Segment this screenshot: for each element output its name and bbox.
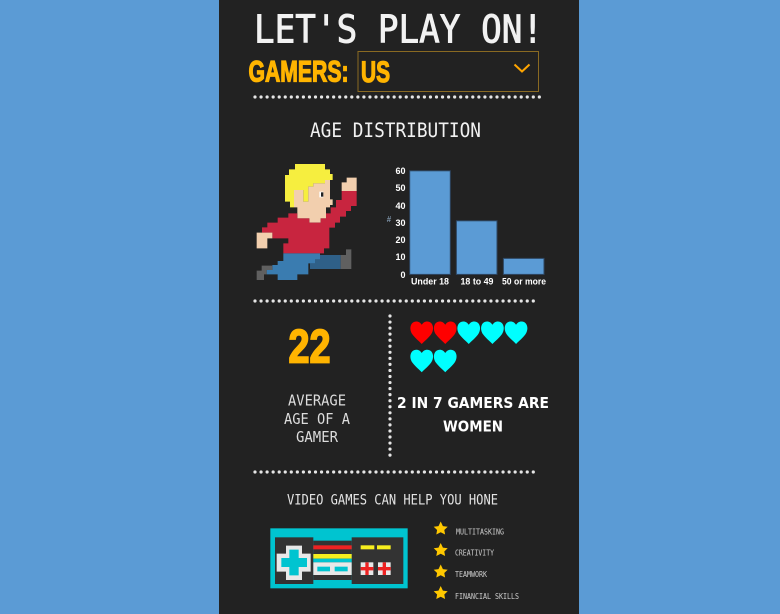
stat: women gamers [397, 394, 549, 436]
x axis labels [411, 276, 546, 286]
skills list [434, 522, 519, 601]
big number: 22 [288, 320, 330, 372]
dark central panel [219, 0, 579, 614]
gamers selector [248, 52, 538, 92]
stat: women gamers: WOMEN [443, 418, 503, 436]
y axis labels: 60 [395, 166, 406, 176]
y axis labels: 0 [400, 270, 406, 280]
x axis labels: 50 or more [502, 276, 546, 286]
skill labels: FINANCIAL SKILLS [455, 592, 519, 601]
icon: running pixel character [257, 164, 357, 280]
selector box [358, 52, 538, 92]
icon: game controller [270, 528, 408, 588]
bars [410, 171, 544, 274]
x axis labels: 18 to 49 [460, 276, 494, 286]
y axis title: # [387, 215, 392, 224]
skill labels: CREATIVITY [455, 548, 494, 558]
y axis labels: 40 [395, 201, 406, 211]
heart pictogram: 2 of 7 [410, 322, 527, 372]
stat: women gamers: 2 IN 7 GAMERS ARE [397, 394, 549, 412]
selector label: GAMERS: [248, 56, 348, 88]
stat: average age [284, 320, 351, 446]
stat caption: GAMER [296, 428, 339, 446]
stat caption: AGE OF A [284, 410, 351, 428]
y axis labels [395, 166, 406, 280]
x axis labels: Under 18 [411, 276, 449, 286]
y axis labels: 20 [395, 235, 406, 245]
selected value: US [361, 56, 390, 89]
skill labels: TEAMWORK [455, 570, 487, 579]
skill labels [455, 528, 519, 601]
stat caption: AVERAGE [288, 392, 346, 410]
title: LET'S PLAY ON! [254, 8, 543, 52]
y axis labels: 10 [395, 252, 406, 262]
stat caption [284, 392, 351, 446]
icon: dropdown chevron [514, 64, 530, 72]
icon: stars [434, 522, 448, 599]
y axis labels: 30 [395, 218, 406, 228]
heading: video games skills: VIDEO GAMES CAN HELP YOU HONE [287, 492, 498, 508]
y axis labels: 50 [395, 183, 406, 193]
heading: age distribution: AGE DISTRIBUTION [310, 119, 481, 142]
skill labels: MULTITASKING [456, 528, 504, 536]
bar chart: age distribution [387, 166, 546, 286]
